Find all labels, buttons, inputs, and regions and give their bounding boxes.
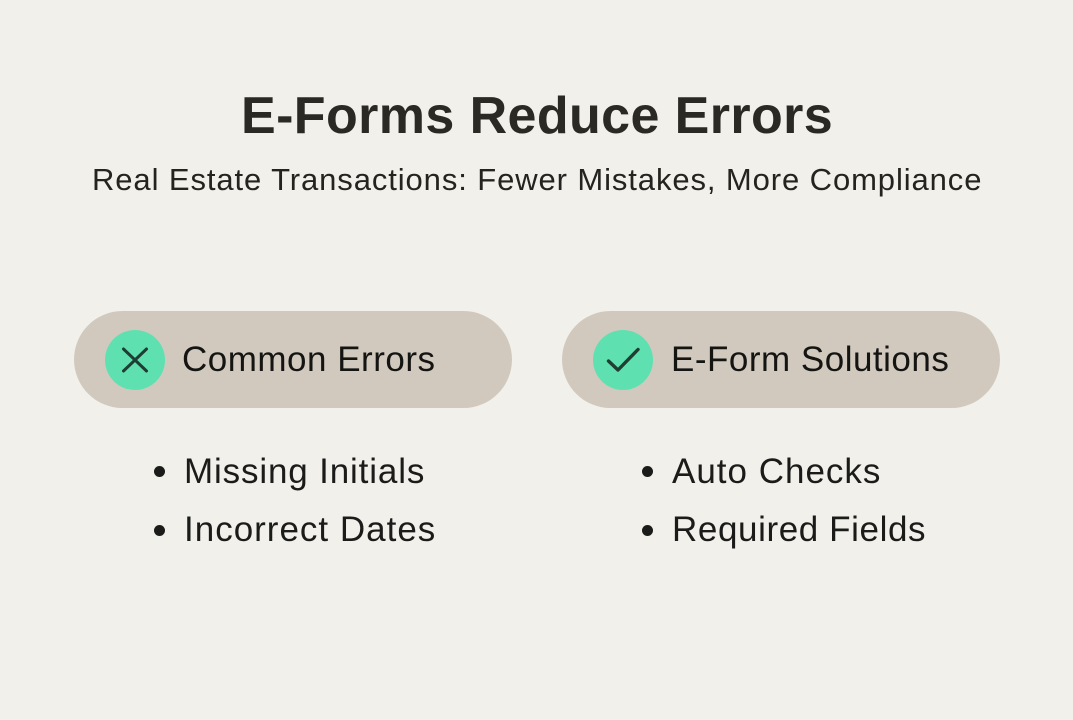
subtitle: Real Estate Transactions: Fewer Mistakes, More Compliance	[92, 162, 982, 197]
bullet: required fields: Required Fields	[672, 510, 926, 549]
heading: common errors: Common Errors	[182, 340, 435, 379]
icon: check	[593, 330, 653, 390]
title: E-Forms Reduce Errors	[241, 87, 833, 145]
bullet: auto checks: Auto Checks	[672, 452, 881, 491]
header pill: e-form solutions	[562, 311, 1000, 408]
bullet: missing initials: Missing Initials	[184, 452, 425, 491]
panel: e-form solutions	[562, 311, 1000, 408]
icon: cross	[105, 330, 165, 390]
bullet: incorrect dates: Incorrect Dates	[184, 510, 436, 549]
header pill: common errors	[74, 311, 512, 408]
panel: common errors	[74, 311, 512, 408]
heading: e-form solutions: E-Form Solutions	[671, 340, 949, 379]
